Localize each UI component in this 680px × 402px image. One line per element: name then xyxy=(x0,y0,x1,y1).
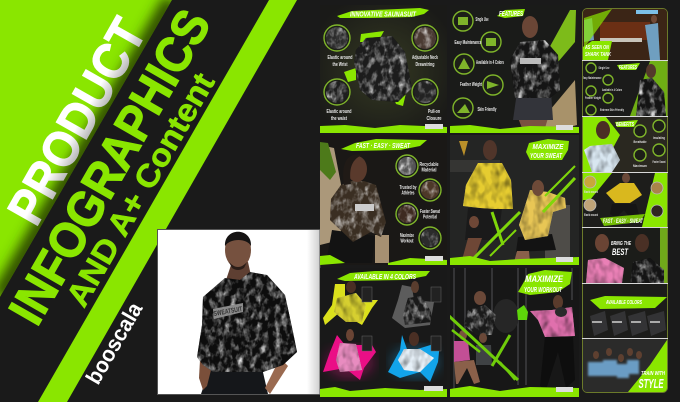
feature: waist xyxy=(324,79,352,122)
boxer jacket xyxy=(530,307,575,337)
title: AVAILABLE IN 4 COLORS xyxy=(353,272,416,281)
white photo backdrop xyxy=(158,230,320,394)
panel: innovative saunasuit xyxy=(320,5,447,133)
feature: neck drawstring xyxy=(412,25,439,68)
beige streak xyxy=(546,80,577,126)
title: INNOVATIVE SAUNASUIT xyxy=(350,12,417,18)
bottom strips xyxy=(320,255,447,265)
title: FEATURES xyxy=(499,11,523,18)
bottom strip xyxy=(320,387,447,397)
grey model jacket xyxy=(403,296,432,325)
logo tag xyxy=(556,257,573,262)
title xyxy=(530,142,564,160)
benefit: workout: Maximize xyxy=(400,233,414,239)
benefit: workout: Workout xyxy=(400,238,414,244)
splash: yellow xyxy=(323,284,378,325)
panel: features: Single Use xyxy=(476,17,488,23)
title: MAXIMIZE xyxy=(525,274,564,284)
man two shorts xyxy=(516,234,556,252)
seated dark model xyxy=(476,345,492,365)
benefit: sweat potential: Potential xyxy=(423,214,437,220)
man two head xyxy=(532,180,544,196)
standing model jacket xyxy=(464,305,496,335)
section: features xyxy=(582,61,667,116)
jacket xyxy=(354,36,412,102)
neck xyxy=(226,262,252,280)
benefit: athletes xyxy=(400,179,441,201)
section: features: Available in 4 Colors xyxy=(602,88,622,92)
beige wall xyxy=(320,147,342,245)
seated dark model head xyxy=(479,333,487,343)
section: bring the best: BRING THE xyxy=(611,241,631,247)
title brush xyxy=(526,139,569,160)
logo tag xyxy=(556,125,573,130)
yellow model jacket xyxy=(334,293,366,322)
gold logo xyxy=(459,141,468,156)
green splash xyxy=(360,31,384,42)
benefit: athletes: Trusted by xyxy=(400,185,417,191)
section: benefits: Breathable xyxy=(634,140,647,144)
panel: mobile a+ column xyxy=(582,8,668,392)
seated pink model legs xyxy=(454,360,480,384)
woman head xyxy=(347,156,367,182)
shirt logo xyxy=(213,303,243,319)
section: fast easy sweat: FAST · EASY · SWEAT xyxy=(603,219,644,225)
panel: features xyxy=(450,5,579,133)
gym rack xyxy=(454,268,572,390)
feature: neck drawstring: Drawstring xyxy=(416,62,434,68)
section: features: Single Use xyxy=(598,66,610,70)
hair xyxy=(225,232,251,246)
green impact xyxy=(517,305,528,320)
hero product photo xyxy=(158,230,320,394)
right forearm xyxy=(265,358,288,394)
pink glow xyxy=(326,346,374,378)
title: FAST · EASY · SWEAT xyxy=(356,141,411,150)
man jacket xyxy=(510,40,560,98)
green wash xyxy=(320,142,336,180)
title xyxy=(524,274,564,294)
title brush xyxy=(341,139,427,151)
wall band xyxy=(545,205,570,265)
green corner panel xyxy=(0,0,172,297)
green slashes xyxy=(449,316,518,380)
section: bring the best xyxy=(583,228,667,283)
splash: grey xyxy=(392,285,434,328)
feature: closure xyxy=(412,79,442,122)
section: available colors xyxy=(583,284,667,338)
feature: waist: Elastic around xyxy=(326,109,352,115)
boxing glove xyxy=(555,307,567,317)
woman hair xyxy=(343,154,362,185)
benefit: material xyxy=(396,155,438,177)
section: benefits: BENEFITS xyxy=(616,122,634,128)
benefit: material: Material xyxy=(422,168,437,174)
feature: feather weight: Feather Weight xyxy=(460,82,482,88)
section: benefits: Maximum xyxy=(633,164,647,168)
feature: four colors: Available in 4 Colors xyxy=(476,60,504,66)
feature: wrist: the Wrist xyxy=(332,62,348,68)
gym lights xyxy=(450,160,500,172)
title: YOUR WORKOUT xyxy=(524,287,562,294)
pink model jacket xyxy=(336,343,362,372)
title brush xyxy=(497,9,525,18)
man one head xyxy=(483,140,497,160)
logo tag xyxy=(425,256,443,261)
man one hand xyxy=(469,216,479,228)
section: train with style: TRAIN WITH xyxy=(641,371,666,377)
panel background xyxy=(326,18,440,126)
panel background xyxy=(320,245,321,256)
standing model head xyxy=(474,291,486,305)
green streak xyxy=(548,10,576,62)
blue glow xyxy=(391,346,439,378)
seated pink model head xyxy=(459,330,467,340)
logo tag xyxy=(424,386,443,391)
bottom strip xyxy=(450,386,579,397)
section: as seen on shark tank: SHARK TANK xyxy=(585,52,612,58)
section dividers xyxy=(582,60,668,338)
green slashes xyxy=(474,166,575,258)
feature: closure: Closure xyxy=(426,116,442,122)
feature: neck drawstring: Adjustable Neck xyxy=(412,55,439,61)
man head xyxy=(522,16,538,38)
green splash side xyxy=(344,68,356,82)
section: features: Feather Weight xyxy=(585,96,602,100)
splash: pink xyxy=(323,335,376,380)
seated pink model xyxy=(454,341,470,362)
man two legs xyxy=(514,251,530,262)
splash: blue xyxy=(388,335,440,382)
section: train with style xyxy=(583,339,667,392)
heading: and a+ content: AND A+ Content xyxy=(59,66,222,312)
section: fast easy sweat: Elastic around xyxy=(584,213,598,217)
benefit: sweat potential: Faster Sweat xyxy=(420,209,440,215)
section: benefits xyxy=(583,117,667,172)
bottom strip xyxy=(450,256,579,265)
man one shorts xyxy=(465,208,502,240)
section: train with style: STYLE xyxy=(638,376,664,391)
section: available colors: AVAILABLE COLORS xyxy=(605,300,642,306)
title brush xyxy=(337,271,430,281)
section: fast easy sweat: Elastic around xyxy=(584,190,598,194)
panel background xyxy=(450,5,579,133)
section: benefits: Faster Sweat xyxy=(652,160,666,164)
feature: skin friendly: Skin Friendly xyxy=(478,107,497,113)
beard xyxy=(229,262,247,270)
benefit: workout xyxy=(400,227,441,249)
feature: wrist xyxy=(324,25,352,68)
head xyxy=(225,232,251,268)
man one legs xyxy=(462,238,482,260)
shirt logo: SWEATSUIT xyxy=(213,306,243,318)
title brush xyxy=(518,270,572,295)
section: features: Easy Maintenance xyxy=(582,76,602,80)
column outline xyxy=(582,8,668,392)
left forearm xyxy=(199,360,212,390)
panel background xyxy=(320,268,447,397)
section: bring the best: BEST xyxy=(612,247,629,257)
title: MAXIMIZE xyxy=(532,142,564,151)
boxer head xyxy=(553,295,563,309)
section: features: Extreme Skin Friendly xyxy=(600,108,624,112)
benefit: sweat potential xyxy=(396,203,440,225)
bottom strip xyxy=(320,125,447,133)
feature: closure: Pull-on xyxy=(428,109,440,115)
blue model head xyxy=(409,332,419,346)
section: as seen on shark tank xyxy=(583,9,667,60)
trousers xyxy=(201,368,268,394)
logo tag xyxy=(425,124,443,129)
man legs xyxy=(518,120,548,127)
section: fast easy sweat xyxy=(583,173,667,227)
product pouches xyxy=(362,287,441,351)
green splash lower xyxy=(395,94,406,106)
woman jacket xyxy=(330,181,386,242)
pink model head xyxy=(346,329,354,341)
blue model jacket xyxy=(398,349,434,372)
shirt logo xyxy=(520,58,541,64)
title: YOUR SWEAT xyxy=(530,153,562,160)
bottom strip xyxy=(450,125,579,133)
floor xyxy=(375,235,389,263)
column content xyxy=(582,9,667,392)
man shorts xyxy=(513,97,553,120)
section: features: FEATURES xyxy=(619,65,637,71)
panel background xyxy=(450,135,579,265)
jacket xyxy=(197,272,297,372)
section: benefits: Insulating xyxy=(653,136,665,140)
benefit: athletes: Athletes xyxy=(402,190,414,196)
panel: maximize your sweat xyxy=(450,135,579,265)
benefit: material: Recyclable xyxy=(420,162,438,168)
title brush xyxy=(337,8,429,18)
brand name: booscala xyxy=(81,297,148,388)
feature: easy maintenance: Easy Maintenance xyxy=(454,40,482,46)
shirt logo xyxy=(355,204,374,211)
left banner xyxy=(0,0,297,402)
feature: waist: the waist xyxy=(331,116,347,122)
logo tag xyxy=(556,387,573,392)
man two jacket xyxy=(519,190,566,240)
panel: available in 4 colors xyxy=(320,268,447,397)
section: as seen on shark tank: AS SEEN ON xyxy=(584,45,610,51)
panel background xyxy=(450,268,579,397)
man one jacket xyxy=(463,163,513,209)
green diagonal stripe xyxy=(38,0,297,402)
yellow model head xyxy=(346,281,356,293)
panel: fast easy sweat xyxy=(320,135,447,265)
panel: maximize your workout xyxy=(449,268,579,397)
grey model head xyxy=(411,281,419,293)
punching bag xyxy=(493,299,519,333)
feature: wrist: Elastic around xyxy=(328,55,352,61)
woman legs xyxy=(326,230,375,263)
boxer pants xyxy=(540,336,575,390)
